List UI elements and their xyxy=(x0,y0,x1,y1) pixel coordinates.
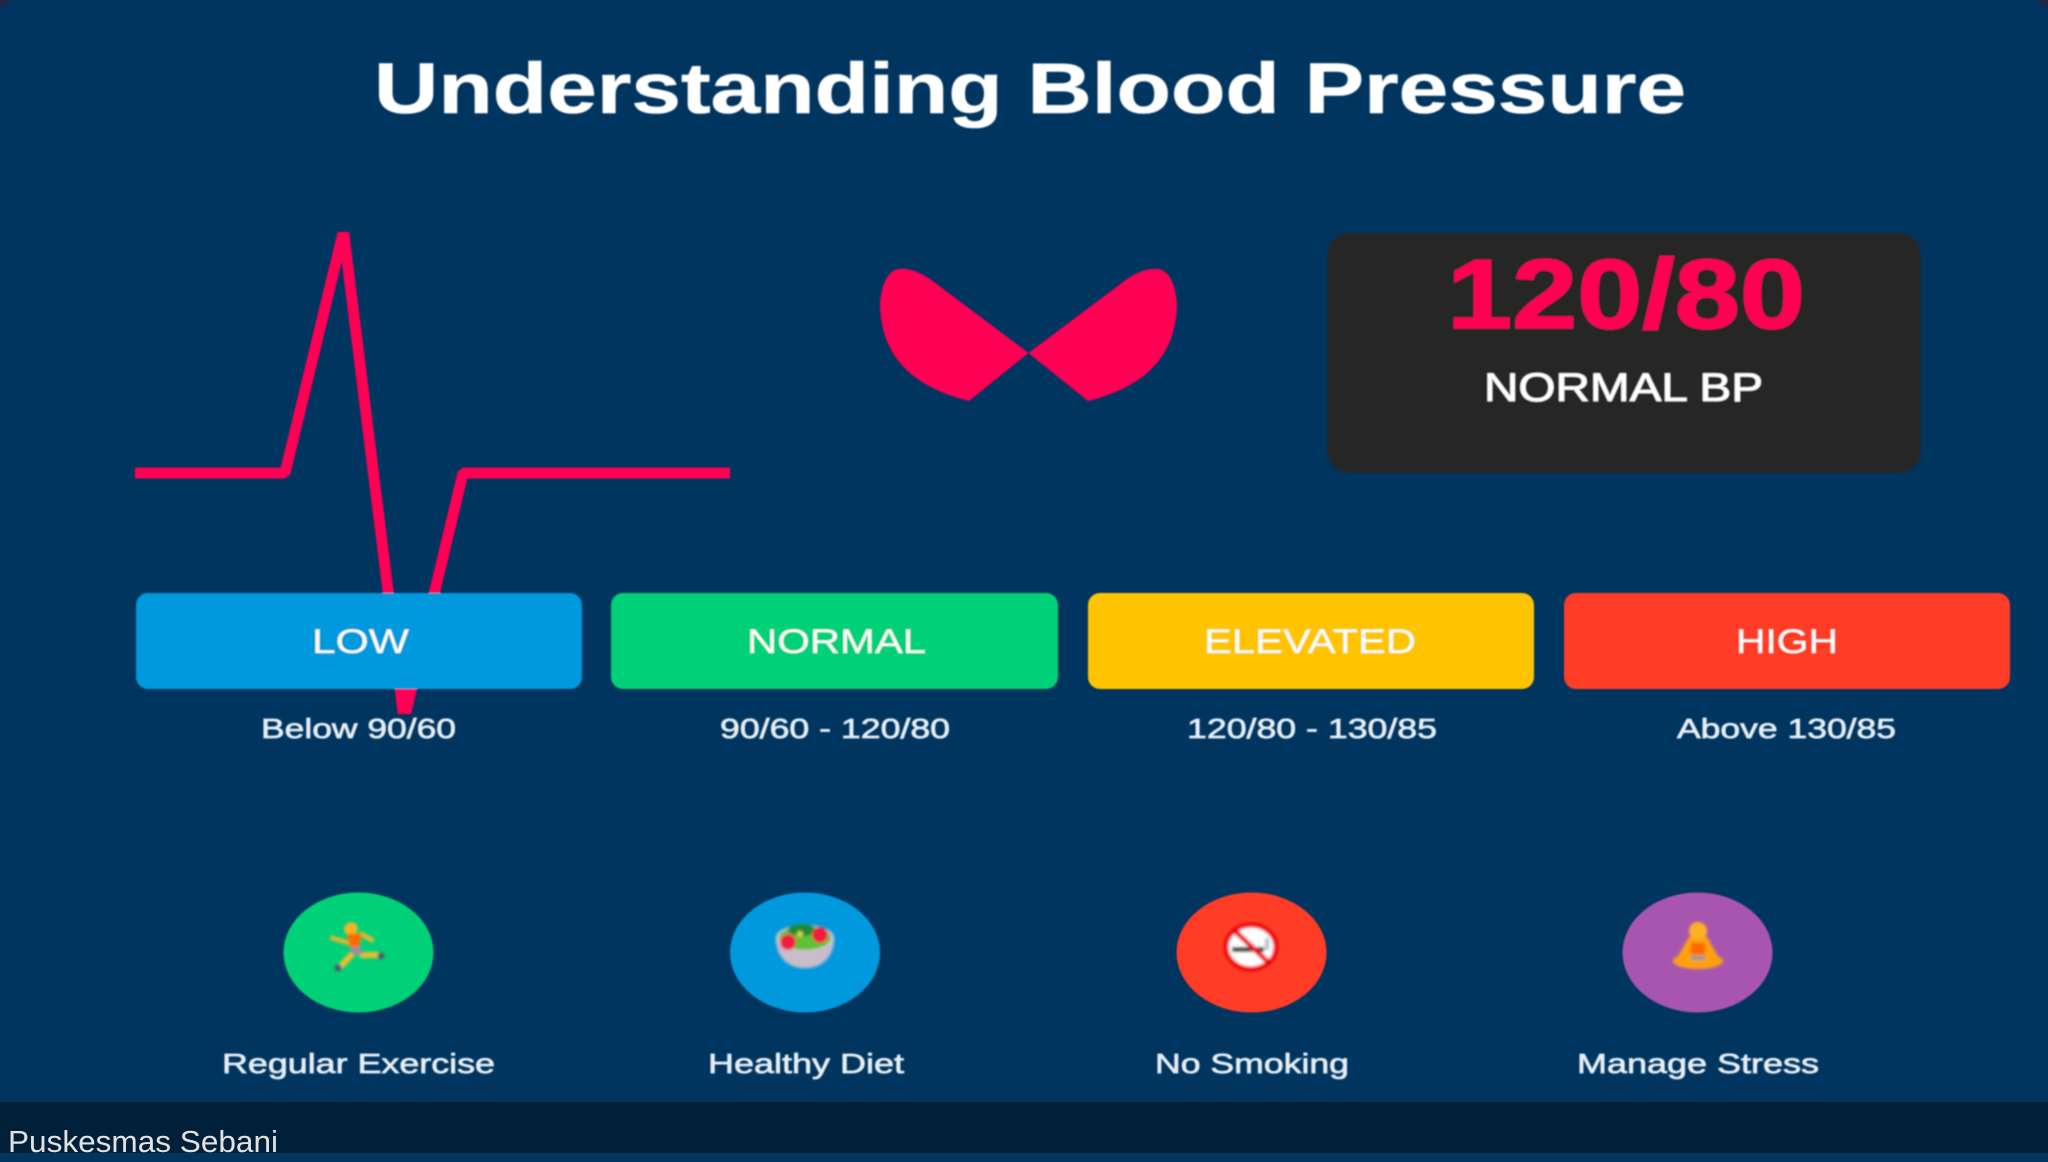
icon: meditating person xyxy=(1673,922,1723,969)
category: normal xyxy=(611,593,1058,689)
tip circle: manage stress xyxy=(1622,892,1772,1012)
panel: normal reading card xyxy=(1327,233,1921,473)
tip circle: regular exercise xyxy=(284,892,434,1012)
reading caption: NORMAL BP xyxy=(1484,366,1763,410)
icon: salad bowl xyxy=(776,924,834,968)
low label: LOW xyxy=(312,623,409,661)
tip circle: healthy diet xyxy=(730,892,880,1012)
high label: HIGH xyxy=(1736,623,1838,661)
tip label: healthy diet: Healthy Diet xyxy=(708,1048,904,1079)
corner shade: top left xyxy=(0,0,14,8)
normal range: 90/60 - 120/80 xyxy=(720,713,950,744)
icon: runner xyxy=(332,922,384,972)
chart: ECG heartbeat line xyxy=(135,231,730,720)
icon: no smoking sign xyxy=(1226,925,1276,969)
high range: Above 130/85 xyxy=(1677,713,1896,744)
corner shade: top right xyxy=(2034,0,2048,8)
reading value: 120/80 xyxy=(1447,239,1805,349)
normal label: NORMAL xyxy=(747,623,926,661)
category: low xyxy=(136,593,582,689)
category: high xyxy=(1564,593,2010,689)
elevated range: 120/80 - 130/85 xyxy=(1187,713,1437,744)
footer bar xyxy=(0,1102,2048,1153)
tip label: no smoking: No Smoking xyxy=(1155,1048,1349,1079)
exercise label: Regular Exercise xyxy=(222,1048,495,1079)
tip circle: no smoking xyxy=(1176,892,1326,1012)
elevated label: ELEVATED xyxy=(1204,623,1416,661)
footer text: Puskesmas Sebani xyxy=(8,1124,278,1159)
tip label: manage stress: Manage Stress xyxy=(1577,1048,1819,1079)
icon: heart wings xyxy=(880,269,1177,401)
category: elevated xyxy=(1088,593,1534,689)
title: Understanding Blood Pressure xyxy=(374,50,1686,129)
low range: Below 90/60 xyxy=(261,713,456,744)
